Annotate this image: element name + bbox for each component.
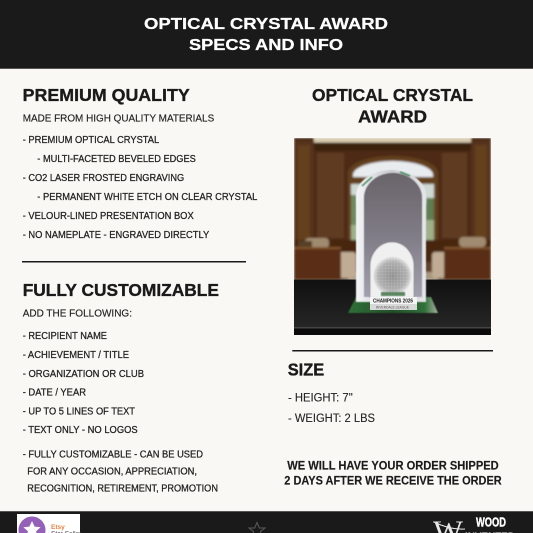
outer crystal arch [356, 170, 426, 302]
small arch with golf ball [370, 242, 414, 298]
customization list: - DATE / YEAR [23, 388, 86, 399]
inner frosted panel [364, 173, 422, 297]
shipping note [284, 460, 502, 488]
heading: fully customizable: FULLY CUSTOMIZABLE [23, 280, 219, 300]
customization list [23, 331, 144, 436]
size list: - HEIGHT: 7" [288, 392, 353, 404]
shipping note: 2 DAYS AFTER WE RECEIVE THE ORDER [284, 476, 502, 488]
wood logo: WOOD [476, 516, 506, 530]
customization list: - ACHIEVEMENT / TITLE [23, 350, 129, 361]
green facets [362, 172, 410, 186]
room background [294, 138, 491, 280]
customization note: - FULLY CUSTOMIZABLE - CAN BE USED [23, 449, 203, 460]
subheading: materials: MADE FROM HIGH QUALITY MATERIALS [23, 112, 214, 124]
product title: AWARD [358, 107, 427, 127]
crystal award [348, 170, 438, 313]
header banner [0, 0, 533, 69]
green base [348, 297, 438, 313]
engraved plate: CHAMPIONS 2026 [373, 299, 413, 305]
customization note: RECOGNITION, RETIREMENT, PROMOTION [27, 483, 218, 494]
customization list: - TEXT ONLY - NO LOGOS [23, 425, 138, 436]
header title: OPTICAL CRYSTAL AWARD [144, 16, 388, 33]
product title [312, 85, 473, 127]
panel: fully customizable [23, 280, 219, 494]
etsy star seller badge [17, 514, 82, 533]
materials list: - NO NAMEPLATE - ENGRAVED DIRECTLY [23, 230, 210, 241]
header title [144, 16, 388, 54]
customization list: - UP TO 5 LINES OF TEXT [23, 406, 135, 417]
customization list: - ORGANIZATION OR CLUB [23, 369, 144, 380]
materials list: - VELOUR-LINED PRESENTATION BOX [23, 211, 194, 222]
golf ball [374, 257, 412, 295]
subheading: add the following: ADD THE FOLLOWING: [23, 308, 132, 320]
customization list: - RECIPIENT NAME [23, 331, 107, 342]
materials list: - CO2 LASER FROSTED ENGRAVING [23, 173, 184, 184]
desk [294, 280, 491, 328]
materials list: - MULTI-FACETED BEVELED EDGES [37, 154, 196, 165]
sofas and benches [305, 238, 329, 248]
materials list [23, 135, 258, 241]
engraved plate: RIVERDALE LEAGUE [376, 304, 409, 309]
size list [288, 392, 375, 425]
materials list: - PREMIUM OPTICAL CRYSTAL [23, 135, 160, 146]
product photo: crystal award on desk [294, 138, 491, 335]
wood logo [433, 515, 515, 533]
customization note: FOR ANY OCCASION, APPRECIATION, [27, 466, 197, 477]
etsy star seller badge: Etsy [51, 524, 65, 531]
header title: SPECS AND INFO [189, 37, 343, 54]
size list: - WEIGHT: 2 LBS [288, 413, 375, 425]
footer bar [0, 511, 533, 533]
shipping note: WE WILL HAVE YOUR ORDER SHIPPED [287, 460, 499, 472]
materials list: - PERMANENT WHITE ETCH ON CLEAR CRYSTAL [37, 192, 258, 203]
panel: size [288, 359, 375, 425]
customization note [23, 449, 218, 494]
engraved plate [370, 297, 417, 310]
heading: premium quality: PREMIUM QUALITY [23, 85, 190, 105]
product title: OPTICAL CRYSTAL [312, 85, 473, 105]
heading: size: SIZE [288, 359, 324, 379]
panel: premium quality [23, 85, 258, 241]
icon: star [249, 522, 265, 533]
